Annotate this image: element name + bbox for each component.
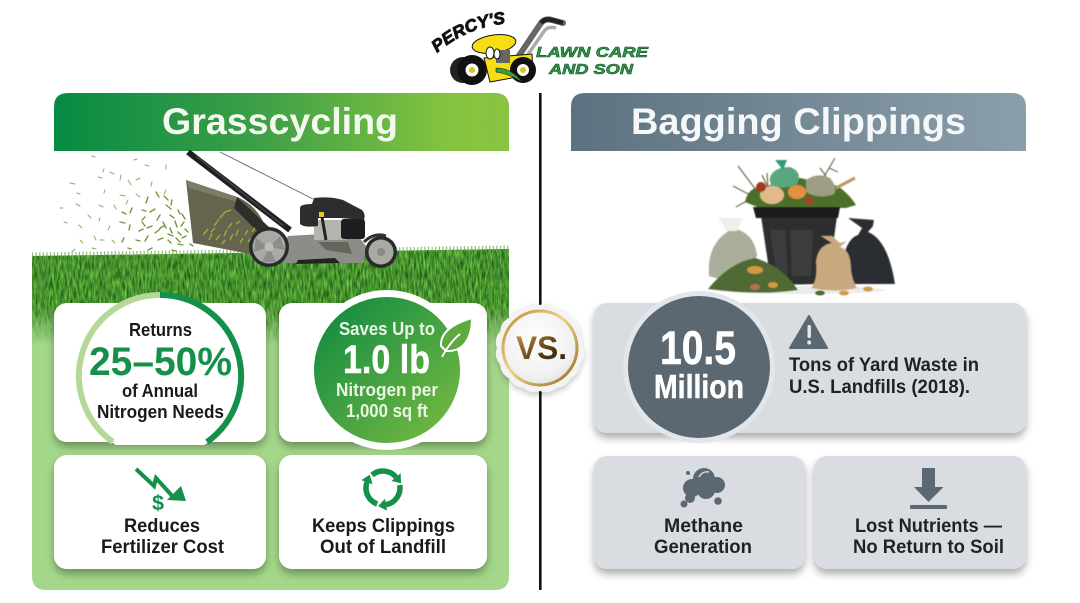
card: Saves up to 1.0 lb	[279, 290, 487, 450]
panel background	[32, 249, 509, 590]
card text	[312, 516, 455, 558]
stat text: Returns	[129, 320, 192, 340]
heading: Bagging Clippings	[571, 93, 1026, 151]
card text	[654, 516, 752, 558]
stat description	[789, 355, 979, 398]
card text: Out of Landfill	[320, 537, 446, 558]
card text: Lost Nutrients —	[855, 516, 1002, 537]
logo text: Lawn Care and Son: AND SON	[548, 61, 634, 78]
stat text: 25–50%	[89, 340, 232, 384]
heading: Grasscycling	[54, 93, 509, 151]
stat text	[336, 319, 438, 421]
card text: No Return to Soil	[853, 537, 1004, 558]
heading: Grasscycling: Grasscycling	[162, 101, 398, 142]
stat text: of Annual	[122, 381, 198, 401]
icon: falling dollar: $	[152, 492, 164, 515]
VS badge: VS.	[516, 330, 567, 366]
icon: warning triangle	[790, 316, 827, 348]
icon: methane cloud	[680, 468, 725, 508]
stat text	[89, 320, 232, 422]
card text: Fertilizer Cost	[101, 537, 225, 558]
icon: falling dollar	[136, 469, 186, 515]
progress ring	[78, 294, 242, 458]
panel: Bagging Clippings	[571, 93, 1026, 569]
card: Keeps Clippings Out of Landfill	[279, 455, 487, 569]
trash bin and bags photo	[708, 158, 895, 296]
VS badge	[496, 304, 584, 392]
card text	[101, 516, 225, 558]
card text: Keeps Clippings	[312, 516, 455, 537]
card: Lost Nutrients	[814, 456, 1026, 569]
stat text: Nitrogen per	[336, 380, 438, 400]
stat text: 1,000 sq ft	[346, 401, 428, 421]
mower photo	[186, 152, 397, 268]
stat description: Tons of Yard Waste in	[789, 355, 979, 376]
card text: Reduces	[124, 516, 200, 537]
card text: Generation	[654, 537, 752, 558]
card: Returns 25–50%	[54, 294, 266, 458]
icon: recycle arrows	[361, 471, 401, 511]
logo icon: cartoon mower	[450, 19, 563, 85]
card text	[853, 516, 1004, 558]
card text: Methane	[664, 516, 743, 537]
icon: down arrow to soil	[910, 468, 947, 509]
logo text: Lawn Care and Son	[536, 44, 649, 78]
logo text: Lawn Care and Son: LAWN CARE	[536, 44, 649, 61]
logo text: Percy's: PERCY'S	[431, 12, 505, 54]
green stat circle	[307, 290, 467, 450]
icon: leaf	[441, 318, 472, 357]
stat description: U.S. Landfills (2018).	[789, 377, 970, 398]
divider line	[539, 93, 542, 590]
grass tips along horizon	[32, 248, 509, 255]
stat text: Nitrogen Needs	[97, 402, 224, 422]
card: 10.5 Million tons	[594, 291, 1026, 443]
stat text: 1.0 lb	[343, 338, 430, 382]
card: Reduces Fertilizer Cost	[54, 455, 266, 569]
card: Methane Generation	[594, 456, 805, 569]
stat circle: 10.5	[660, 321, 736, 374]
mown lawn	[32, 249, 509, 342]
stat text: Saves Up to	[339, 319, 435, 339]
stat circle: Million	[654, 368, 744, 405]
heading: Bagging Clippings: Bagging Clippings	[631, 101, 966, 142]
panel: Grasscycling	[32, 93, 509, 590]
grass clippings spray	[60, 156, 193, 252]
logo: Percy's Lawn Care and Son	[431, 12, 649, 85]
stat circle	[623, 291, 775, 443]
